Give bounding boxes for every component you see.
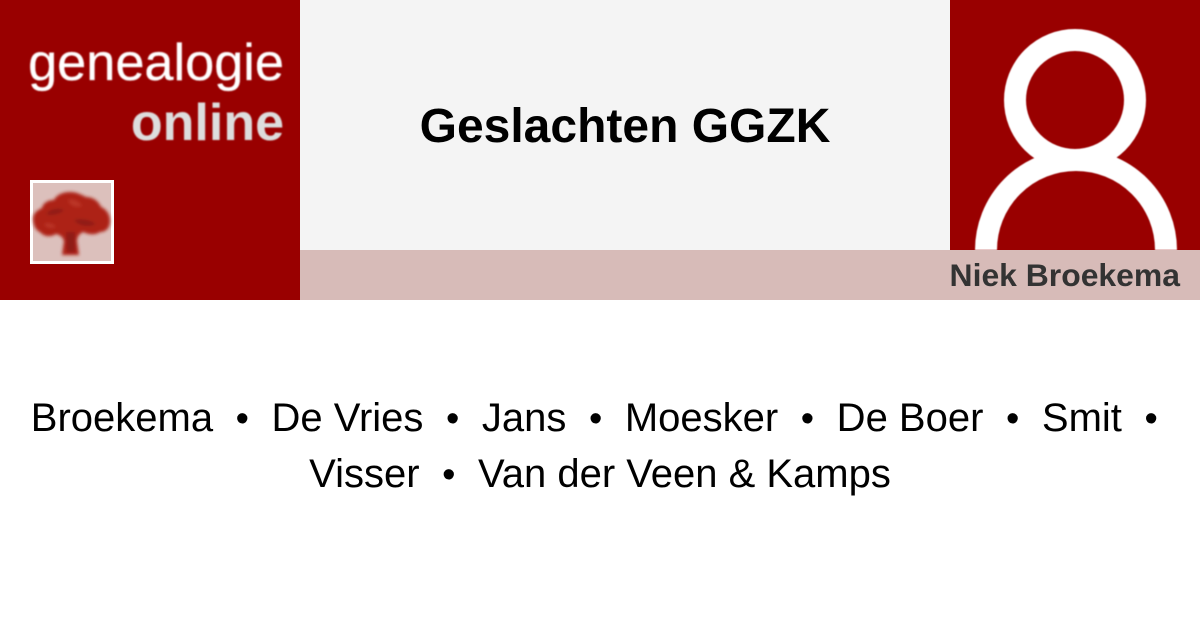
surname list: • — [1006, 398, 1019, 440]
surname list: • — [589, 398, 602, 440]
surname list — [31, 396, 1158, 496]
logo word: genealogie: genealogie — [28, 34, 284, 92]
surname list: • — [801, 398, 814, 440]
surname list: Broekema De Vries Jans Moesker De Boer Smit — [31, 396, 1122, 440]
panel: author avatar — [950, 0, 1200, 250]
surname list: • — [442, 454, 455, 496]
surname list: • — [446, 398, 459, 440]
logo word: online: online — [131, 94, 284, 152]
icon: person — [974, 28, 1178, 250]
panel: logo — [0, 0, 300, 300]
panel: title background — [300, 0, 950, 250]
author name: Niek Broekema — [950, 257, 1180, 293]
surname list: • — [236, 398, 249, 440]
title: Geslachten GGZK — [420, 100, 830, 153]
author strip — [300, 250, 1200, 300]
surname list: • — [1144, 398, 1158, 440]
surname list: Visser Van der Veen & Kamps — [309, 452, 891, 496]
icon: tree — [30, 180, 114, 264]
